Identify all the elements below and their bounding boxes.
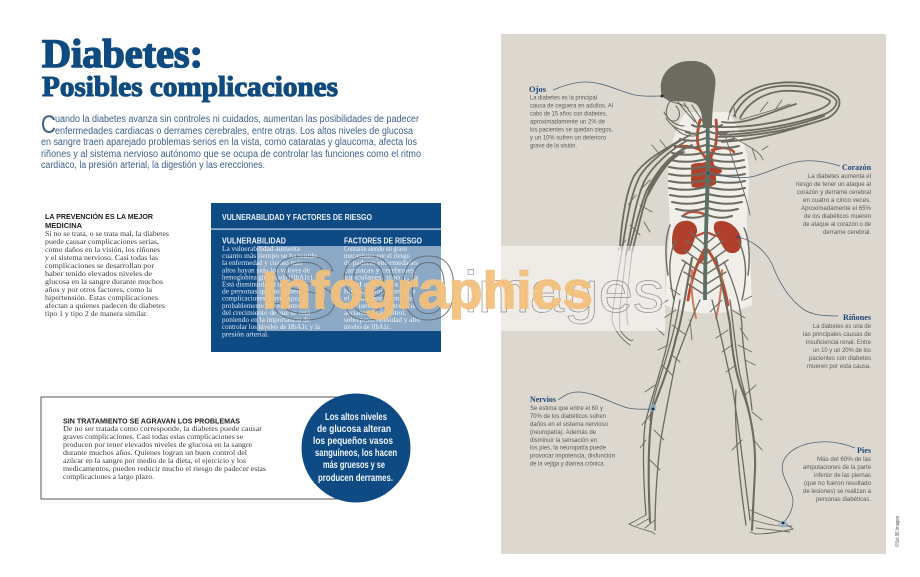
annotation: corazón: La diabetes aumenta el [808, 173, 871, 180]
leg nerves [649, 258, 755, 530]
annotation: riñones: insuficiencia renal. Entre [806, 339, 871, 346]
panel: vulnerabilidad y factores de riesgo: cardiacas y cerebrales, [344, 265, 416, 274]
annotation: corazón: de ataque al corazón o de [803, 221, 871, 228]
intro text: C [41, 111, 56, 139]
watermark band [257, 246, 665, 331]
panel: vulnerabilidad y factores de riesgo: ancianos. Mal control, [344, 308, 406, 317]
text block: la prevención: afectan a quienes padecen de diabetes [45, 301, 165, 310]
connector: corazón [706, 161, 840, 178]
annotation: pies: personas diabéticas. [816, 496, 871, 503]
annotation: pies: Pies [857, 446, 871, 455]
annotation: corazón: de los diabéticos mueren [804, 213, 871, 220]
panel: vulnerabilidad y factores de riesgo: de personas que no tienen [222, 287, 300, 296]
panel: vulnerabilidad y factores de riesgo: poniendo en la importancia de [222, 315, 311, 324]
illustration: nervous system figure [612, 61, 840, 534]
right arm nerves [718, 82, 840, 142]
intro text: riñones y al sistema nervioso autónomo que se ocupa de controlar las funciones como el ritmo [41, 149, 421, 160]
panel: vulnerabilidad y factores de riesgo: presión arterial. [222, 330, 269, 339]
annotation: pies: de lesiones) se realizan a [803, 488, 871, 495]
title: Posibles complicaciones [42, 72, 338, 103]
annotation: pies [803, 446, 872, 503]
annotation: corazón: en cuatro a cinco veces. [803, 197, 871, 204]
panel: vulnerabilidad y factores de riesgo: FACTORES DE RIESGO [344, 236, 422, 246]
text block: la prevención: complicaciones se desarrollan por [45, 261, 154, 270]
panel: sin tratamiento: durante muchos años. Quienes logran un buen control del [63, 448, 248, 457]
annotation: ojos: La diabetes es la principal [530, 94, 597, 101]
annotation: riñones: las principales causas de [803, 331, 871, 338]
panel: vulnerabilidad y factores de riesgo: hemoglobina glicosilada (HbA1c). [222, 272, 314, 281]
title [42, 31, 338, 103]
text block: la prevención: glucosa en la sangre durante muchos [45, 277, 163, 286]
annotation: riñones: La diabetes es una de [813, 323, 871, 330]
panel: body illustration background [501, 34, 886, 554]
text block: la prevención: como daños en la visión, los riñones [45, 245, 160, 254]
annotation: ojos [529, 85, 613, 150]
intro text: enfermedades cardiacas o derrames cerebrales, entre otras. Los altos niveles de glucosa [55, 126, 413, 137]
callout circle: de glucosa alteran [317, 424, 391, 435]
callout circle: sanguíneos, los hacen [315, 448, 397, 459]
panel: vulnerabilidad y factores de riesgo: VULNERABILIDAD Y FACTORES DE RIESGO [222, 213, 372, 222]
panel: vulnerabilidad y factores de riesgo: La vulnerabilidad aumenta [222, 244, 301, 253]
annotation: nervios: de la vejiga y diarrea crónica. [530, 461, 605, 468]
watermark text: images [464, 260, 664, 325]
callout circle: Los altos niveles [325, 412, 387, 423]
text block: la prevención: y el sistema nervioso. Casi todas las [45, 253, 158, 262]
panel: sin tratamiento: azúcar en la sangre por medio de la dieta, el ejercicio y los [63, 456, 246, 465]
panel: sin tratamiento: medicamentos, pueden reducir mucho el riesgo de padecer estas [63, 464, 266, 473]
annotation: riñones [803, 313, 872, 370]
callout circle: más gruesos y se [323, 460, 385, 471]
text block: la prevención: tipo 1 y tipo 2 de manera similar. [45, 309, 148, 318]
annotation: pies: inferior de las piernas [814, 472, 872, 479]
annotation: nervios: (neuropatía). Además de [530, 429, 596, 436]
annotation: ojos: los pacientes se quedan ciegos, [530, 126, 613, 134]
watermark text: S90 [268, 239, 458, 339]
watermark text [262, 239, 664, 339]
brain [661, 61, 716, 128]
ribs [669, 124, 745, 218]
annotation: riñones: un 10 y un 20% de los [813, 347, 872, 354]
panel: vulnerabilidad y factores de riesgo: hipertensión arterial y [344, 287, 416, 296]
text block: la prevención: LA PREVENCIÓN ES LA MEJOR [45, 212, 153, 221]
annotation: nervios: disminuir la sensación en [530, 437, 597, 444]
annotation: corazón: riesgo de tener un ataque al [796, 181, 871, 188]
panel: vulnerabilidad y factores de riesgo: VULNERABILIDAD [222, 236, 286, 246]
annotation: nervios: Nervios [530, 395, 556, 404]
panel: vulnerabilidad y factores de riesgo: niveles de HbA1c. [344, 322, 391, 331]
intro text [41, 111, 421, 171]
annotation: nervios [530, 395, 615, 468]
annotation: corazón: Corazón [842, 163, 871, 172]
annotation: nervios: los pies, la neuropatía puede [530, 445, 606, 452]
connector: nervios [558, 392, 656, 412]
text block: la prevención: Si no se trata, o se trata mal, la diabetes [45, 229, 169, 238]
annotation: pies: (que no fueron resultado [804, 480, 871, 487]
text block: la prevención: años y por otros factores, como la [45, 285, 153, 294]
annotation: nervios: daños en el sistema nervioso [530, 421, 608, 428]
panel: sin tratamiento: SIN TRATAMIENTO SE AGRAVAN LOS PROBLEMAS [63, 416, 240, 426]
annotation: ojos: y un 10% sufren un deterioro [530, 135, 606, 142]
annotation: pies: Más del 60% de las [817, 456, 872, 463]
annotation: pies: amputaciones de la parte [803, 464, 871, 471]
annotation: ojos: causa de ceguera en adultos. Al [530, 102, 613, 109]
watermark text: Infographics [262, 262, 593, 320]
panel: vulnerabilidad y factores de riesgo: Contarán siendo un grave [344, 244, 407, 253]
annotation: riñones: mueren por esta causa. [807, 363, 871, 370]
panel: vulnerabilidad y factores de riesgo: sobrepeso, obesidad y alto [344, 315, 420, 324]
intro text: cardiaco, la presión arterial, la digestión y las erecciones. [41, 160, 265, 171]
panel: vulnerabilidad y factores de riesgo: cuanto más tiempo se ha tenido [222, 251, 317, 260]
panel: sin tratamiento: complicaciones a largo plazo. [63, 472, 154, 481]
annotation: nervios: 70% de los diabéticos sufren [530, 413, 606, 420]
panel: sin tratamiento: De no ser tratada como corresponde, la diabetes puede causar [63, 424, 262, 433]
panel: vulnerabilidad y factores de riesgo: complicaciones graves, quizás [222, 294, 307, 303]
text block: la prevención [45, 212, 169, 318]
left arm nerves [620, 135, 692, 255]
connector: pies [778, 442, 855, 528]
annotation: corazón: Aproximadamente el 65% [801, 205, 871, 212]
callout circle: los pequeños vasos [313, 436, 393, 447]
panel: vulnerabilidad y factores de riesgo: frecuentes entre los [344, 301, 416, 310]
callout circle [302, 394, 410, 502]
connector: ojos [553, 82, 664, 98]
annotation: nervios: provocar impotencia, disfunción [530, 453, 615, 460]
annotation: riñones: pacientes con diabetes [809, 355, 872, 362]
panel: vulnerabilidad y factores de riesgo: vasculares, tipo 1, la [344, 272, 419, 281]
intro text: en sangre traen aparejado problemas serios en la vista, como cataratas y glaucoma, afecta los [41, 137, 417, 148]
annotation: corazón: derrame cerebral. [823, 229, 871, 236]
pelvis herringbone [666, 225, 749, 300]
panel: vulnerabilidad y factores de riesgo: edad avanzada y la [344, 280, 415, 288]
intro text: uando la diabetes avanza sin controles ni cuidados, aumentan las posibilidades de padecer [55, 114, 420, 125]
panel: vulnerabilidad y factores de riesgo: de padecer enfermedades [344, 258, 418, 267]
panel: vulnerabilidad y factores de riesgo: controlar los niveles de HbA1c y la [222, 322, 321, 331]
annotation: corazón: corazón y derrame cerebral [797, 189, 871, 196]
panel: vulnerabilidad y factores de riesgo: Está disminuida en un número [222, 280, 308, 288]
panel: sin tratamiento: producen por tener elevados niveles de glucosa en la sangre [63, 440, 253, 449]
text block: la prevención: puede causar complicaciones serias, [45, 237, 159, 246]
annotation: riñones: Riñones [843, 313, 871, 322]
connector: riñones [736, 236, 838, 316]
panel: sin tratamiento [41, 397, 345, 499]
annotation: ojos: aproximadamente un 2% de [530, 118, 605, 125]
panel: vulnerabilidad y factores de riesgo [211, 203, 441, 352]
panel: vulnerabilidad y factores de riesgo: la enfermedad y cuanto más [222, 258, 302, 267]
annotation: corazón [796, 163, 871, 236]
annotation: ojos: cabo de 15 años con diabetes, [530, 110, 607, 117]
text block: la prevención: MEDICINA [45, 221, 83, 230]
text block: la prevención: hipertensión. Estas complicaciones [45, 293, 158, 302]
panel: sin tratamiento: graves complicaciones. Casi todas estas complicaciones se [63, 432, 244, 441]
panel: vulnerabilidad y factores de riesgo: probablemente por el control [222, 301, 304, 310]
annotation: ojos: grave de la visión. [530, 143, 577, 150]
callout circle: producen derrames. [318, 473, 393, 484]
panel: vulnerabilidad y factores de riesgo: altos hayan sido los valores de [222, 265, 311, 274]
credit: ©Sol 90 Images [894, 516, 901, 547]
annotation: ojos: Ojos [529, 85, 546, 94]
panel: vulnerabilidad y factores de riesgo: del crecimiento de que se está [222, 308, 311, 317]
annotation: nervios: Se estima que entre el 60 y [530, 405, 604, 412]
panel: vulnerabilidad y factores de riesgo: mecanismo por el riesgo [344, 251, 410, 260]
panel: vulnerabilidad y factores de riesgo: el tabaquismo son más [344, 294, 414, 303]
text block: la prevención: haber tenido elevados niveles de [45, 269, 153, 278]
title: Diabetes: [42, 31, 203, 76]
